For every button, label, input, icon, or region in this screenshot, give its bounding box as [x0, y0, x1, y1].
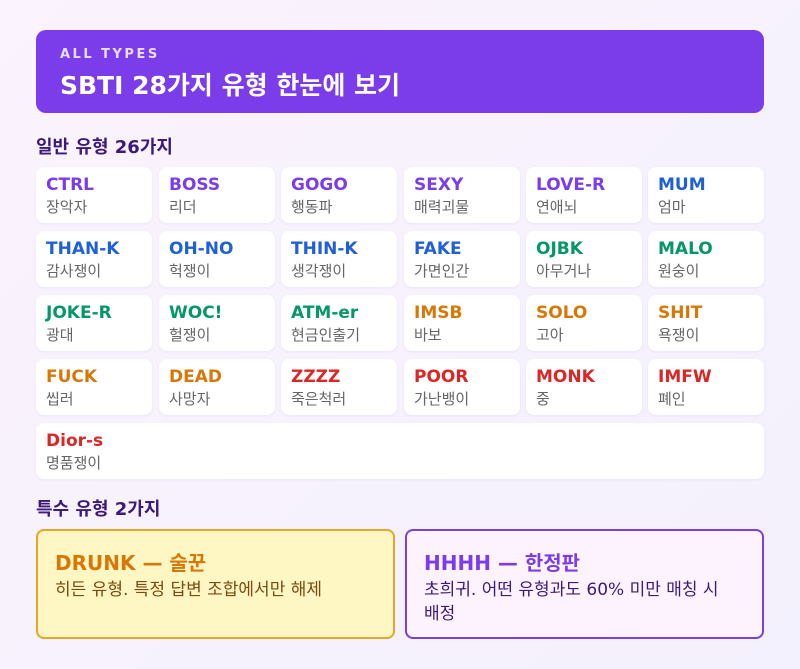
card ATM-er: ATM-er [291, 303, 358, 323]
card SEXY: SEXY [414, 175, 463, 195]
card Dior-s [36, 423, 764, 479]
header banner: SBTI 28가지 유형 한눈에 보기 [60, 71, 400, 100]
card GOGO [281, 167, 397, 223]
card BOSS [159, 167, 275, 223]
card SOLO: SOLO [536, 303, 587, 323]
card OH-NO: 헉쟁이 [169, 262, 210, 280]
card SHIT [648, 295, 764, 351]
card THAN-K [36, 231, 152, 287]
heading: special types: 특수 유형 2가지 [36, 499, 160, 520]
card ATM-er: 현금인출기 [291, 326, 360, 344]
special card DRUNK: 히든 유형. 특정 답변 조합에서만 해제 [55, 580, 322, 600]
card MONK: MONK [536, 367, 595, 387]
card WOC! [159, 295, 275, 351]
card DEAD [159, 359, 275, 415]
card WOC!: WOC! [169, 303, 222, 323]
card JOKE-R [36, 295, 152, 351]
card IMSB: 바보 [414, 326, 442, 344]
card THIN-K: THIN-K [291, 239, 358, 259]
card ZZZZ: 죽은척러 [291, 390, 346, 408]
card THIN-K [281, 231, 397, 287]
card MUM [648, 167, 764, 223]
card MALO: MALO [658, 239, 713, 259]
card MUM: MUM [658, 175, 706, 195]
card IMFW: 폐인 [658, 390, 686, 408]
card ZZZZ [281, 359, 397, 415]
card GOGO: GOGO [291, 175, 348, 195]
card JOKE-R: JOKE-R [46, 303, 112, 323]
card FUCK: 씹러 [46, 390, 74, 408]
card LOVE-R: 연애뇌 [536, 198, 577, 216]
card MALO: 원숭이 [658, 262, 699, 280]
card SHIT: 욕쟁이 [658, 326, 699, 344]
card LOVE-R [526, 167, 642, 223]
card MONK [526, 359, 642, 415]
card CTRL [36, 167, 152, 223]
card OH-NO: OH-NO [169, 239, 233, 259]
card IMFW: IMFW [658, 367, 712, 387]
header banner: ALL TYPES [60, 47, 160, 62]
card BOSS: 리더 [169, 198, 197, 216]
card POOR: POOR [414, 367, 468, 387]
card FUCK: FUCK [46, 367, 97, 387]
card OH-NO [159, 231, 275, 287]
special card DRUNK [36, 529, 395, 639]
card POOR: 가난뱅이 [414, 390, 469, 408]
card CTRL: 장악자 [46, 198, 87, 216]
card SEXY: 매력괴물 [414, 198, 469, 216]
special card HHHH: HHHH — 한정판 [424, 551, 580, 575]
card FAKE [404, 231, 520, 287]
card Dior-s: 명품쟁이 [46, 454, 101, 472]
card SOLO [526, 295, 642, 351]
card WOC!: 헐쟁이 [169, 326, 210, 344]
card CTRL: CTRL [46, 175, 94, 195]
card THAN-K: 감사쟁이 [46, 262, 101, 280]
card IMFW [648, 359, 764, 415]
card SOLO: 고아 [536, 326, 564, 344]
card SEXY [404, 167, 520, 223]
grid of regular types [36, 167, 764, 480]
card THAN-K: THAN-K [46, 239, 119, 259]
special card DRUNK: DRUNK — 술꾼 [55, 551, 206, 575]
card FAKE: FAKE [414, 239, 462, 259]
card FAKE: 가면인간 [414, 262, 469, 280]
special card HHHH [405, 529, 764, 639]
card JOKE-R: 광대 [46, 326, 74, 344]
special card HHHH: 초희귀. 어떤 유형과도 60% 미만 매칭 시 배정 [424, 580, 719, 624]
card GOGO: 행동파 [291, 198, 332, 216]
header banner [36, 30, 764, 113]
card ZZZZ: ZZZZ [291, 367, 340, 387]
card IMSB: IMSB [414, 303, 462, 323]
card BOSS: BOSS [169, 175, 220, 195]
card POOR [404, 359, 520, 415]
card OJBK: 아무거나 [536, 262, 591, 280]
card Dior-s: Dior-s [46, 431, 103, 451]
card ATM-er [281, 295, 397, 351]
heading: regular types: 일반 유형 26가지 [36, 137, 173, 158]
card DEAD: 사망자 [169, 390, 210, 408]
card LOVE-R: LOVE-R [536, 175, 605, 195]
card THIN-K: 생각쟁이 [291, 262, 346, 280]
card IMSB [404, 295, 520, 351]
card OJBK [526, 231, 642, 287]
card MUM: 엄마 [658, 198, 686, 216]
card FUCK [36, 359, 152, 415]
card OJBK: OJBK [536, 239, 583, 259]
card MONK: 중 [536, 390, 550, 408]
card DEAD: DEAD [169, 367, 222, 387]
card MALO [648, 231, 764, 287]
card SHIT: SHIT [658, 303, 702, 323]
